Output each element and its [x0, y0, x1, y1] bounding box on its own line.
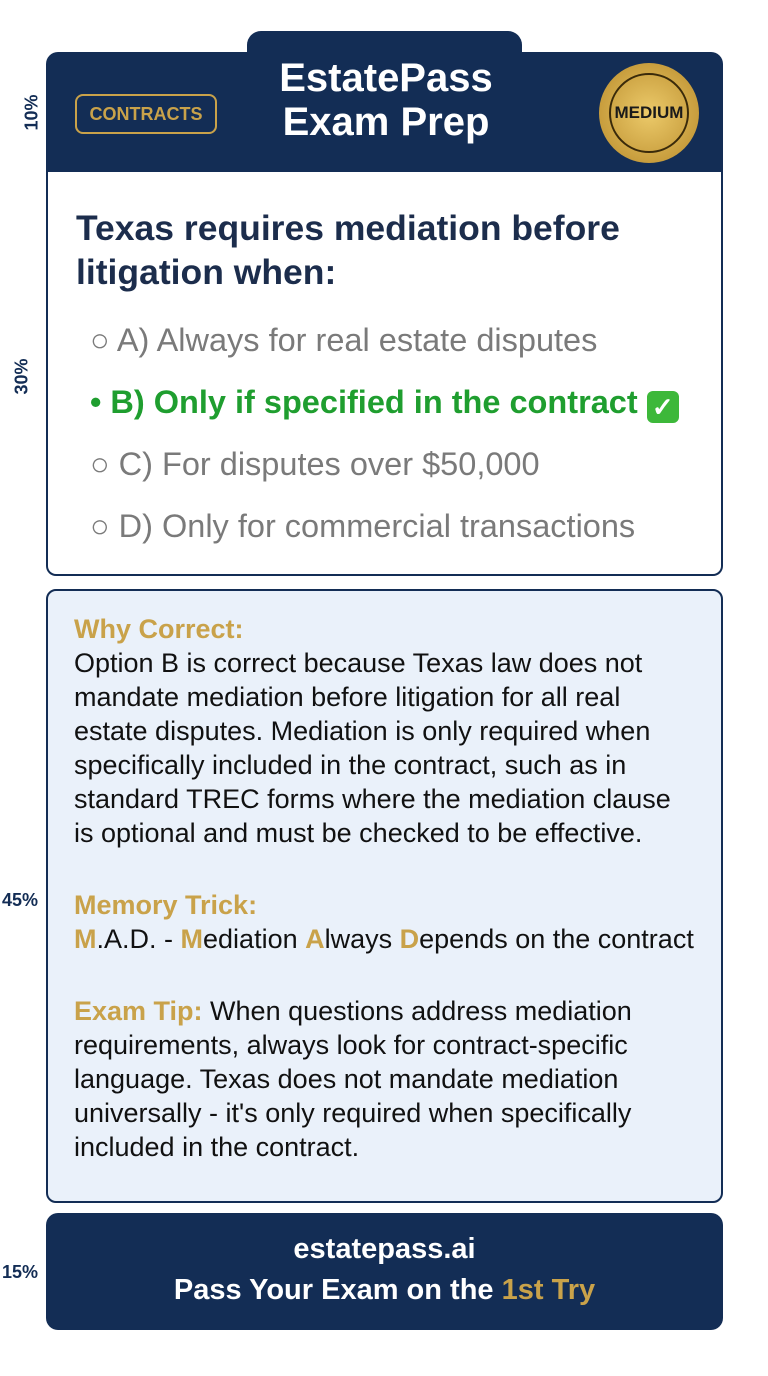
option B correct: ✓ [652, 392, 674, 422]
question: Texas requires mediation before [76, 208, 620, 248]
why correct: is optional and must be checked to be effective. [74, 818, 642, 848]
difficulty seal: MEDIUM [615, 103, 683, 122]
footer: estatepass.ai [293, 1233, 476, 1265]
why correct: mandate mediation before litigation for all real [74, 682, 620, 712]
memory trick [74, 890, 694, 954]
side label 45%: 45% [2, 890, 38, 910]
header panel [46, 31, 723, 172]
option B correct: • B) Only if specified in the contract [90, 384, 638, 420]
exam tip: Exam Tip: When questions address mediation [74, 996, 632, 1026]
why correct: specifically included in the contract, such as in [74, 750, 626, 780]
question panel [46, 172, 723, 576]
exam tip: language. Texas does not mandate mediation [74, 1064, 618, 1094]
why correct: Option B is correct because Texas law does not [74, 648, 642, 678]
footer [46, 1213, 723, 1330]
memory trick: Memory Trick: [74, 890, 257, 920]
question [76, 208, 620, 292]
option A: ○ A) Always for real estate disputes [90, 322, 597, 358]
side label 15%: 15% [2, 1262, 38, 1282]
title [279, 56, 493, 144]
footer: Pass Your Exam on the 1st Try [174, 1274, 595, 1306]
category badge: CONTRACTS [90, 104, 202, 124]
question: litigation when: [76, 252, 336, 292]
why correct: Why Correct: [74, 614, 244, 644]
exam tip: requirements, always look for contract-specific [74, 1030, 628, 1060]
explanation panel [46, 589, 723, 1203]
why correct [74, 614, 671, 848]
side label 10%: 10% [22, 94, 42, 131]
why correct: estate disputes. Mediation is only required when [74, 716, 650, 746]
exam tip: included in the contract. [74, 1132, 359, 1162]
exam tip [74, 996, 632, 1162]
difficulty seal [599, 63, 699, 163]
side label 30%: 30% [12, 358, 32, 395]
title: Exam Prep [283, 100, 489, 144]
title: EstatePass [279, 56, 493, 100]
exam tip: universally - it's only required when specifically [74, 1098, 631, 1128]
option D: ○ D) Only for commercial transactions [90, 508, 635, 544]
category badge [75, 94, 217, 134]
option C: ○ C) For disputes over $50,000 [90, 446, 540, 482]
memory trick: M.A.D. - Mediation Always Depends on the contract [74, 924, 694, 954]
why correct: standard TREC forms where the mediation clause [74, 784, 671, 814]
